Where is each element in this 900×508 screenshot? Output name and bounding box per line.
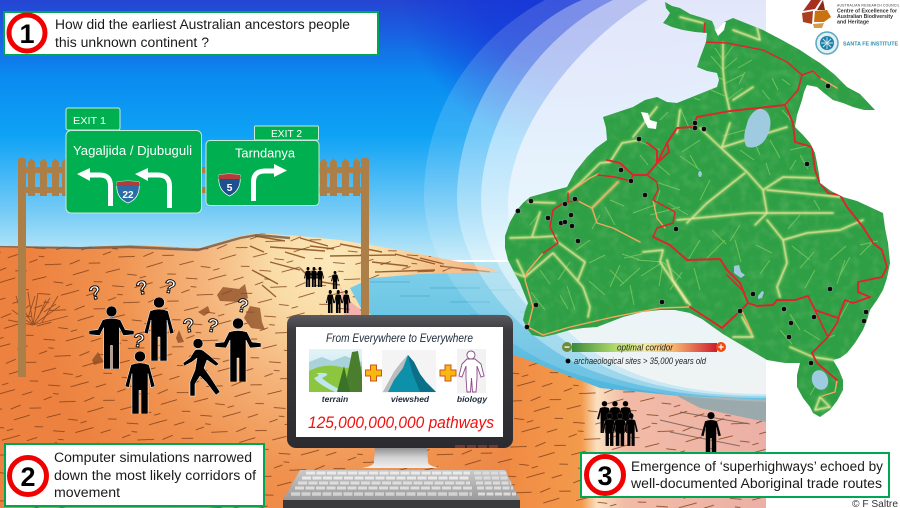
road sign gantry fence [18, 158, 369, 377]
badge 1 [9, 15, 45, 51]
badge 2: 2 [20, 462, 36, 492]
minus symbol [562, 342, 572, 352]
left post [18, 158, 26, 377]
badge 3 [586, 456, 624, 494]
sky background [0, 0, 766, 260]
dune crest streaks [250, 236, 490, 297]
arc band 2 [457, 0, 766, 398]
screen title: From Everywhere to Everywhere [326, 333, 473, 345]
person running [183, 338, 220, 396]
computer [283, 315, 520, 508]
label: biology: biology [457, 394, 488, 404]
archaeological site dots [515, 83, 869, 366]
secondary yellow corridors [507, 17, 863, 410]
sandy dune foreground [0, 230, 766, 508]
white right panel [766, 0, 900, 508]
question marks: ? [131, 330, 146, 353]
map legend [562, 342, 726, 366]
logo text: Australian Biodiversity [837, 14, 894, 20]
lakes [698, 109, 831, 392]
map white inlets [641, 22, 726, 129]
callout 1 text: this unknown continent ? [55, 35, 209, 50]
corridor glow [507, 17, 863, 410]
legend dot [566, 359, 570, 363]
pathways count: 125,000,000,000 pathways [308, 414, 494, 432]
label: terrain: terrain [322, 394, 348, 404]
Exit 2 label: EXIT 2 [271, 129, 302, 140]
Yagaljida panel [66, 130, 202, 213]
callout 2 text: Computer simulations narrowed [54, 450, 252, 465]
logo text: and Heritage [837, 20, 870, 26]
Exit 2 tab [254, 126, 318, 140]
sign: Exit 1 [66, 108, 202, 213]
monitor status lights [455, 445, 498, 448]
plus symbol [716, 342, 726, 352]
viewshed picture [382, 350, 436, 393]
lone walker [331, 271, 339, 289]
callout box 3 [581, 453, 889, 497]
person shrugging left [89, 306, 134, 369]
Tarndanya label: Tarndanya [235, 146, 296, 160]
lone person [701, 412, 721, 454]
badge 1: 1 [19, 19, 35, 49]
arrow: left turn 2 [135, 168, 170, 208]
distant people on beach [304, 267, 350, 313]
fence rails [26, 167, 361, 193]
map: Sahul corridors [500, 0, 895, 420]
confused people group [89, 297, 261, 414]
sign: Exit 2 [206, 126, 319, 206]
callout 3 text [630, 459, 883, 491]
optimal corridor gradient bar [572, 343, 717, 352]
red superhighway corridors [543, 23, 887, 380]
Yagaljida label: Yagaljida / Djubuguli [73, 143, 192, 158]
interstate shield 5: 5 [227, 182, 233, 194]
person standing front [125, 351, 155, 414]
group of six [597, 401, 638, 446]
eroded mounds [92, 284, 265, 365]
logo mark [802, 0, 831, 28]
people near coast, bottom right [597, 401, 721, 454]
callout box 2 [5, 444, 264, 506]
legend label: archaeological sites: archaeological sites > 35,000 years old [574, 356, 707, 366]
person standing back [144, 297, 174, 361]
Exit 1 label: EXIT 1 [73, 115, 106, 127]
trio upper [304, 267, 324, 287]
plus sign 1 [366, 365, 382, 381]
sea streaks [370, 272, 540, 315]
horizon ridge [0, 235, 290, 250]
Tarndanya panel [206, 140, 319, 206]
arrow: left turn 1 [77, 168, 110, 206]
label: viewshed: viewshed [391, 394, 430, 404]
bush [8, 292, 68, 325]
monitor screen [296, 327, 503, 437]
arrow: right turn [254, 164, 287, 201]
callout box 1 [4, 12, 378, 55]
logo: Santa Fe Institute [816, 32, 898, 54]
question marks: ? [87, 282, 103, 305]
far sea band [677, 396, 766, 422]
orange mid-strength corridors [525, 71, 837, 396]
sky darkening at upper right [340, 0, 766, 240]
callout 3 text: well-documented Aboriginal trade routes [630, 476, 882, 491]
plus sign 2 [440, 365, 456, 381]
question marks: ? [182, 315, 197, 338]
legend label: optimal corridor: optimal corridor [617, 342, 674, 352]
fine radial veins [530, 46, 878, 395]
arc band 3 [481, 0, 766, 396]
logo text: AUSTRALIAN RESEARCH COUNCIL [837, 4, 900, 8]
callout 2 text [54, 450, 256, 500]
Exit 1 tab [66, 108, 120, 130]
biology picture [457, 349, 486, 393]
fence pickets [28, 158, 360, 196]
question marks: ? [235, 295, 250, 318]
person shrugging right [215, 318, 261, 382]
keyboard [283, 470, 520, 508]
badge 2 [10, 458, 46, 494]
sea [340, 262, 766, 402]
map landmass [505, 2, 890, 417]
badge 3: 3 [597, 461, 613, 491]
callout 2 text: movement [54, 485, 120, 500]
logo: Santa Fe Institute: SANTA FE INSTITUTE [843, 42, 898, 48]
monitor bezel [287, 315, 513, 448]
arc band 1 [424, 0, 766, 402]
trio lower [326, 290, 350, 313]
inner pale arc [508, 0, 766, 394]
question marks [87, 276, 250, 353]
question marks: ? [134, 277, 150, 300]
question marks: ? [205, 315, 220, 338]
logo text [837, 4, 900, 26]
terrain picture [309, 349, 362, 392]
interstate shield 22: 22 [122, 190, 134, 201]
question marks: ? [162, 276, 178, 299]
logo: Centre of Excellence [802, 0, 900, 28]
callout 2 text: down the most likely corridors of [54, 468, 256, 483]
callout 1 text [55, 17, 350, 50]
callout 3 text: Emergence of ‘superhighways’ echoed by [631, 459, 883, 474]
callout 1 text: How did the earliest Australian ancestors people [55, 17, 350, 32]
monitor stand [362, 447, 440, 468]
right post [361, 158, 369, 318]
map terrain texture [500, 0, 895, 420]
